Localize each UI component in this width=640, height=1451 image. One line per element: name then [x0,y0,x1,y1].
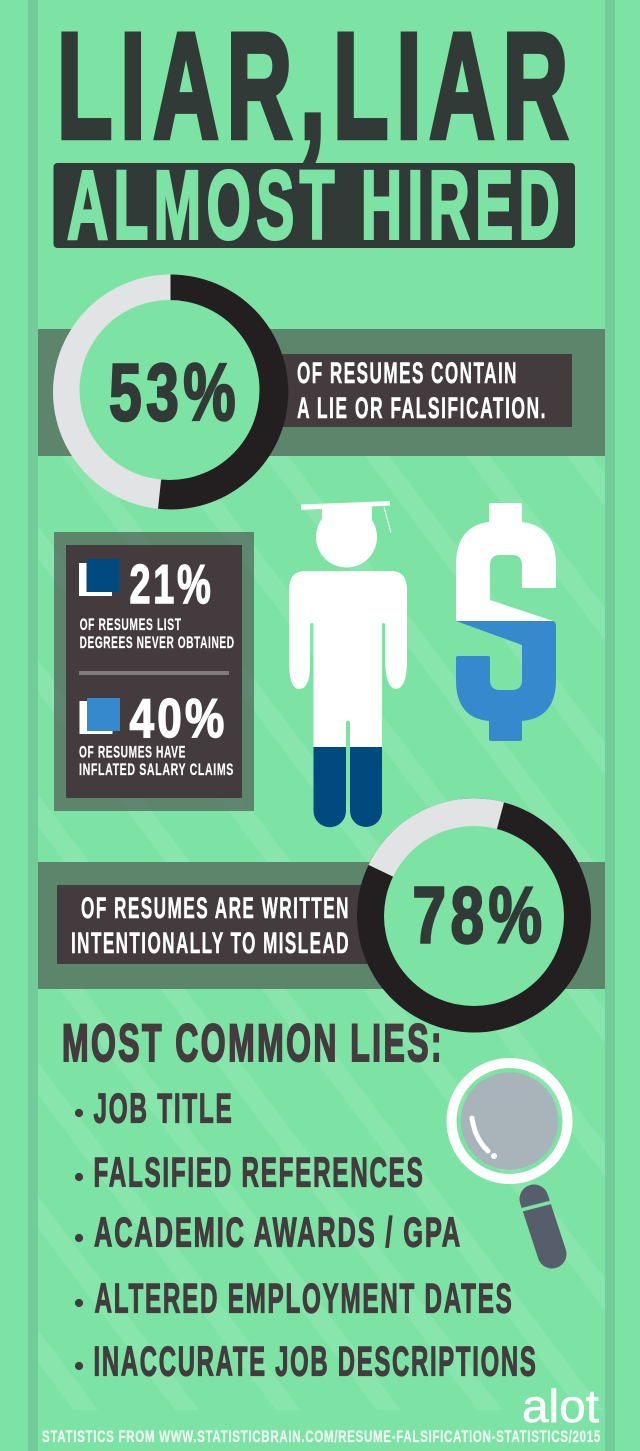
caption: degrees never obtained: OF RESUMES LIST [80,615,182,634]
icon: dark blue square legend [79,559,120,596]
text box: written to mislead [57,885,372,964]
caption: inflated salary claims: INFLATED SALARY CLAIMS [79,760,234,779]
icon: magnifying glass [452,1063,568,1254]
panel: 53 percent stat band [38,274,605,510]
logo: alot: alot [522,1380,599,1432]
donut chart: 53 percent [53,274,288,510]
panel: degree and salary stats [54,532,254,811]
text box: resumes contain a lie [270,354,572,427]
list item: academic awards [76,1208,462,1256]
list: most common lies [76,1084,538,1384]
donut chart: 78 percent [357,798,591,1032]
stat: 21 percent: 21% [130,553,214,615]
caption: inflated salary claims: OF RESUMES HAVE [79,742,186,762]
list item: job title: JOB TITLE [94,1084,234,1132]
icon: light blue square legend [80,698,120,734]
list item: job title [76,1084,234,1132]
icon: graduate figure [289,501,407,827]
donut chart: 53 percent: 53% [109,348,240,438]
panel: 78 percent stat band [38,798,605,1032]
text box: written to mislead: INTENTIONALLY TO MISLEAD [71,927,350,960]
caption: inflated salary claims [79,742,234,779]
donut chart: 78 percent: 78% [412,870,546,960]
caption: degrees never obtained: DEGREES NEVER OBTAINED [80,633,235,652]
text box: written to mislead: OF RESUMES ARE WRITTEN [81,892,350,925]
list item: falsified references [76,1148,424,1196]
icon: dollar sign [456,503,556,741]
stat: 40 percent: 40% [130,687,228,749]
caption: degrees never obtained [80,615,235,652]
